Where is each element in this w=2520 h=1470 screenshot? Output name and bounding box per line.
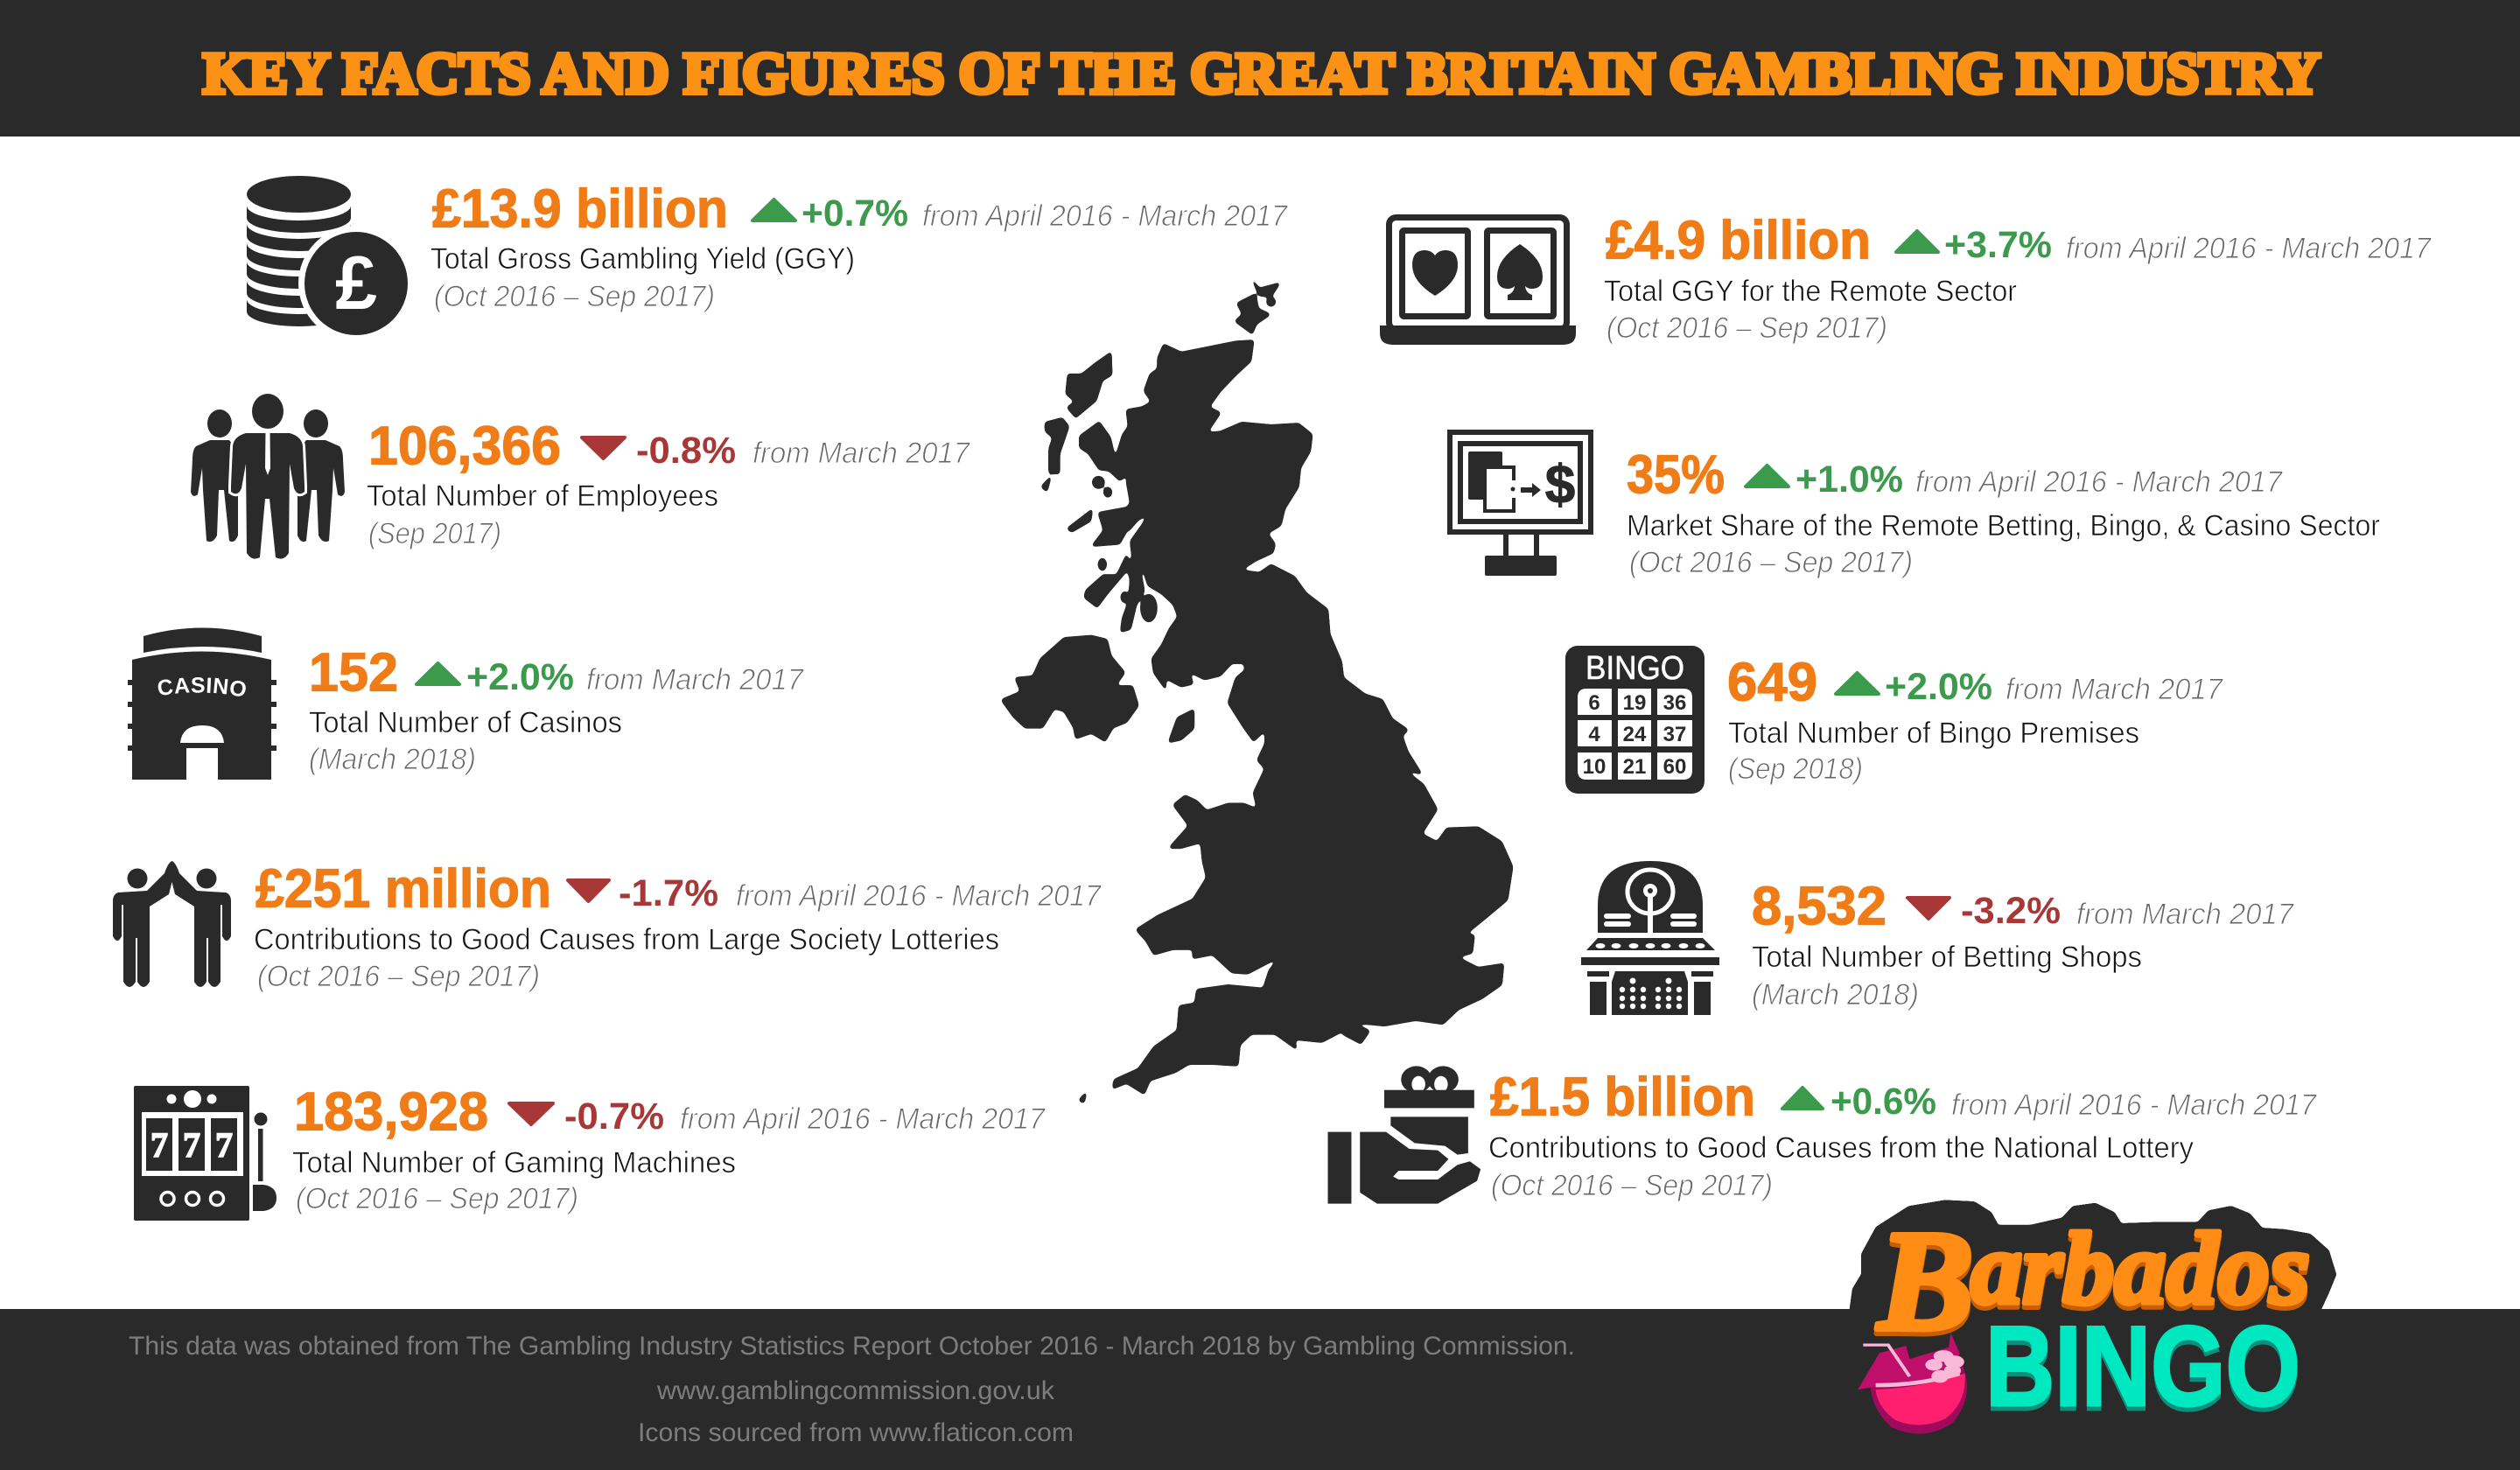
icon: bingo card: 21 <box>1623 755 1646 779</box>
stat: gaming machines <box>134 1082 1046 1221</box>
icon: monitor with dollar: $ <box>1545 455 1575 515</box>
trend arrow up <box>1836 673 1879 694</box>
label: Total Number of Casinos <box>309 706 622 739</box>
icon: bingo card: 36 <box>1663 691 1686 715</box>
source website: www.gamblingcommission.gov.uk <box>656 1376 1055 1405</box>
icon: three business people <box>191 394 345 559</box>
change: -1.7% <box>619 872 718 914</box>
icon: casino building: CASINO <box>158 677 246 696</box>
icon: bingo card: 10 <box>1583 755 1606 779</box>
logo word shadow: arbados <box>1970 1215 2310 1330</box>
stat: betting shops <box>1581 861 2294 1015</box>
label: Total Number of Betting Shops <box>1752 941 2142 974</box>
change: +0.7% <box>802 192 908 234</box>
icon: bingo card: 4 <box>1588 723 1600 746</box>
header banner <box>0 0 2520 136</box>
trend arrow down <box>1908 898 1950 919</box>
date: (Oct 2016 – Sep 2017) <box>1491 1169 1773 1202</box>
date: (Oct 2016 – Sep 2017) <box>434 280 715 313</box>
icon: bingo card: 6 <box>1588 691 1600 715</box>
logo word BINGO shadow: BINGO <box>1985 1306 2300 1434</box>
date: (Sep 2018) <box>1728 752 1863 786</box>
icon: bingo card <box>1565 646 1704 794</box>
period: from March 2017 <box>2006 673 2223 706</box>
change: -0.7% <box>564 1096 664 1138</box>
period: from April 2016 - March 2017 <box>2066 232 2432 265</box>
change: +3.7% <box>1944 224 2052 266</box>
icon: laptop with cards <box>1380 217 1576 345</box>
logo word Barbados: arbados <box>1970 1211 2310 1326</box>
icon: slot machine <box>134 1086 276 1221</box>
trend arrow up <box>1746 466 1788 486</box>
label: Total GGY for the Remote Sector <box>1604 275 2017 308</box>
stat: remote sector GGY <box>1380 210 2432 345</box>
trend arrow up <box>752 200 795 220</box>
change: +1.0% <box>1796 458 1903 500</box>
label: Market Share of the Remote Betting, Bingo, & Casino Sector <box>1627 509 2380 542</box>
icon: betting terminal <box>1581 861 1719 1015</box>
trend arrow down <box>568 880 609 901</box>
change: +2.0% <box>466 656 574 698</box>
date: (Oct 2016 – Sep 2017) <box>1606 312 1887 345</box>
period: from March 2017 <box>586 663 804 696</box>
stat: casinos <box>128 628 804 780</box>
date: (Oct 2016 – Sep 2017) <box>296 1182 578 1215</box>
trend arrow up <box>1782 1088 1823 1109</box>
period: from April 2016 - March 2017 <box>736 879 1102 913</box>
change: +0.6% <box>1830 1081 1936 1123</box>
logo icon: coconut drink <box>1858 1333 1967 1434</box>
title: KEY FACTS AND FIGURES OF THE GREAT BRITAIN GAMBLING INDUSTRY <box>203 41 2320 106</box>
stat: large society lotteries <box>113 859 1102 993</box>
value: 106,366 <box>368 416 561 476</box>
period: from April 2016 - March 2017 <box>922 200 1288 233</box>
change: -0.8% <box>636 430 736 472</box>
map of Great Britain and Northern Ireland <box>1002 280 1513 1102</box>
icon: bingo card: 19 <box>1623 691 1646 715</box>
date: (Oct 2016 – Sep 2017) <box>257 960 540 993</box>
icon: coins with pound <box>247 176 414 341</box>
date: (March 2018) <box>309 743 476 776</box>
trend arrow up <box>416 663 459 684</box>
stat: total gross gambling yield <box>247 176 1288 341</box>
logo word BINGO: BINGO <box>1985 1302 2300 1430</box>
value: 183,928 <box>294 1082 488 1143</box>
value: £13.9 billion <box>432 178 728 240</box>
period: from March 2017 <box>2076 898 2294 931</box>
footer <box>0 1309 2520 1470</box>
icon: two people high five <box>113 861 231 987</box>
change: -3.2% <box>1961 890 2061 932</box>
label: Contributions to Good Causes from Large Society Lotteries <box>254 923 999 956</box>
date: (Sep 2017) <box>368 517 501 550</box>
period: from March 2017 <box>752 437 970 470</box>
value: 35% <box>1627 444 1725 506</box>
value: £4.9 billion <box>1606 210 1871 271</box>
icon credit: Icons sourced from www.flaticon.com <box>638 1418 1074 1447</box>
icon: slot machine: 7 <box>215 1125 233 1165</box>
period: from April 2016 - March 2017 <box>1951 1088 2317 1122</box>
icon: coins with pound: £ <box>335 242 377 326</box>
logo word Barbados: B <box>1876 1200 1974 1361</box>
stat: national lottery contributions <box>1328 1066 2317 1204</box>
stat: bingo premises <box>1565 646 2223 794</box>
stat: employees <box>191 394 970 559</box>
date: (Oct 2016 – Sep 2017) <box>1629 546 1913 579</box>
date: (March 2018) <box>1752 978 1919 1012</box>
change: +2.0% <box>1885 666 1992 708</box>
label: Total Number of Gaming Machines <box>292 1146 736 1180</box>
trend arrow down <box>509 1103 553 1124</box>
value: £251 million <box>256 859 551 919</box>
value: 8,532 <box>1752 877 1886 936</box>
icon: bingo card: 60 <box>1663 755 1686 779</box>
value: 649 <box>1727 653 1817 712</box>
period: from April 2016 - March 2017 <box>680 1102 1046 1136</box>
label: Total Gross Gambling Yield (GGY) <box>430 242 855 276</box>
logo backing blob <box>1851 1201 2334 1315</box>
label: Total Number of Employees <box>367 480 718 513</box>
icon: bingo card: 24 <box>1623 723 1647 746</box>
trend arrow up <box>1896 231 1938 252</box>
stat: remote market share <box>1450 432 2380 579</box>
icon: slot machine: 7 <box>183 1125 200 1165</box>
icon: bingo card: BINGO <box>1586 650 1684 687</box>
label: Contributions to Good Causes from the National Lottery <box>1488 1131 2194 1165</box>
icon: slot machine: 7 <box>150 1125 168 1165</box>
source note: This data was obtained from The Gambling Industry Statistics Report October 2016 - March 2018 by Gambling Commission. <box>129 1332 1575 1361</box>
value: 152 <box>309 642 398 704</box>
logo: Barbados Bingo <box>1851 1200 2334 1434</box>
icon: hand holding gift <box>1328 1066 1480 1204</box>
icon: monitor with dollar <box>1450 432 1591 576</box>
value: £1.5 billion <box>1490 1068 1755 1127</box>
icon: casino building <box>128 628 276 780</box>
period: from April 2016 - March 2017 <box>1915 466 2283 499</box>
icon: bingo card: 37 <box>1663 723 1686 746</box>
trend arrow down <box>582 438 625 458</box>
label: Total Number of Bingo Premises <box>1728 717 2139 750</box>
logo word shadow: B <box>1876 1205 1974 1365</box>
